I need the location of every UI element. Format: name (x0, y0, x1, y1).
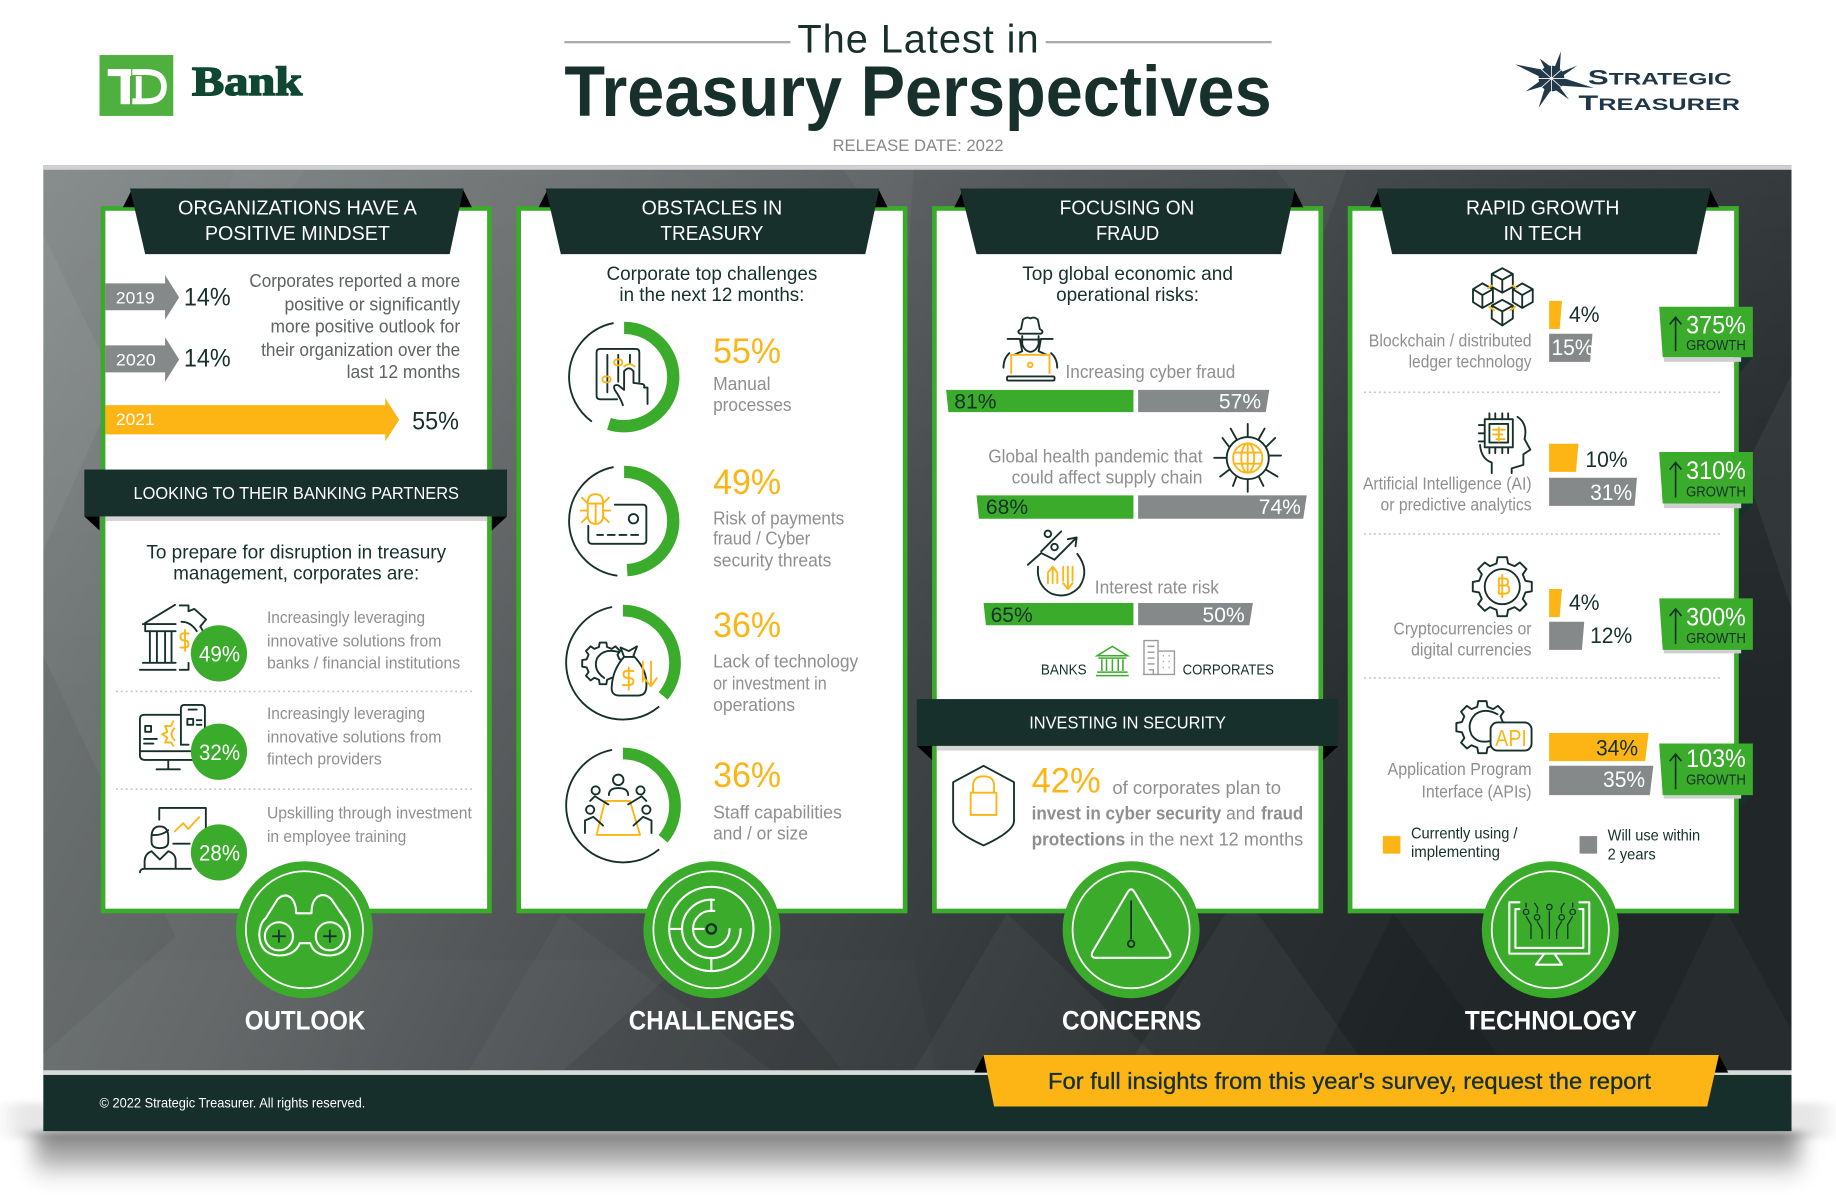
flag: 310% growth: 310% (1686, 458, 1746, 485)
badge: technology: TECHNOLOGY (1465, 1005, 1637, 1035)
tech: artificial intelligence: or predictive analytics (1381, 495, 1532, 515)
footer bar (43, 1070, 1792, 1131)
icon: blockchain cubes (1473, 268, 1533, 326)
legend: will use within 2 years: Will use within (1608, 828, 1700, 845)
item: fintech 32%: Increasingly leveraging (267, 704, 425, 723)
text: 42% statement: in the next 12 months (1130, 829, 1303, 849)
icon: gear and money bag (582, 643, 657, 696)
risk: interest rate: Interest rate risk (1095, 578, 1220, 598)
heading: obstacles: TREASURY (660, 222, 764, 245)
heading: rapid growth (1370, 189, 1719, 254)
badge: outlook: OUTLOOK (245, 1005, 366, 1035)
tech: blockchain: 4% (1569, 302, 1599, 327)
heading: obstacles: OBSTACLES IN (642, 196, 782, 219)
subheading: top challenges: Corporate top challenges (607, 264, 817, 285)
icon: computer and phone: 32% (199, 740, 240, 765)
background panel (43, 165, 1792, 1074)
item: payments fraud 49%: 49% (713, 463, 781, 502)
icon: maze target (669, 887, 753, 971)
panel: technology (1350, 189, 1753, 911)
heading: rapid growth: RAPID GROWTH (1466, 196, 1619, 219)
icon: touch sliders (597, 349, 648, 405)
risk: interest rate: 65% (991, 604, 1033, 627)
call to action banner: For full insights from this year's survey, request the report (1048, 1068, 1651, 1094)
title: The Latest in (797, 18, 1039, 62)
call to action banner (974, 1055, 1728, 1107)
heading: fraud (954, 189, 1303, 254)
heading: positive mindset: POSITIVE MINDSET (205, 222, 390, 245)
subheading: top challenges: in the next 12 months: (619, 285, 804, 306)
icon: binoculars (259, 895, 350, 956)
text: outlook paragraph: their organization over the (261, 340, 460, 360)
item: fintech 32%: fintech providers (267, 750, 382, 769)
icon: bug on card (581, 494, 646, 544)
badge: challenges: CHALLENGES (629, 1005, 795, 1035)
subheading: disruption (146, 543, 446, 585)
heading: obstacles (539, 189, 888, 254)
icon: warning triangle (1092, 889, 1170, 958)
legend: banks and corporates: CORPORATES (1183, 662, 1274, 678)
tech: cryptocurrencies: 4% (1569, 590, 1599, 615)
heading: positive mindset (123, 189, 472, 254)
risk: pandemic: could affect supply chain (1012, 468, 1203, 488)
band: investing in security (917, 699, 1338, 760)
item: training 28%: in employee training (267, 827, 406, 846)
heading: positive mindset: ORGANIZATIONS HAVE A (178, 196, 417, 219)
icon: percent and arrows (1028, 531, 1084, 596)
flag: 375% growth: 375% (1686, 313, 1746, 340)
heading: fraud: FRAUD (1096, 222, 1159, 245)
arrow: 2021: 55% (412, 409, 459, 436)
flag: 103% growth (1659, 744, 1753, 809)
subheading: risks: operational risks: (1056, 285, 1199, 306)
item: manual processes 55%: Manual (713, 374, 770, 394)
title (564, 18, 1272, 155)
item: payments fraud 49%: Risk of payments (713, 509, 844, 529)
risk: pandemic: Global health pandemic that (988, 447, 1203, 467)
item: technology 36%: 36% (713, 606, 781, 645)
item: banks 49% (140, 605, 460, 681)
icon: gear with API badge (1456, 701, 1532, 753)
item: technology 36%: operations (713, 695, 795, 715)
copyright: © 2022 Strategic Treasurer. All rights reserved. (100, 1095, 365, 1111)
icon: circuit monitor (1509, 902, 1589, 965)
icon: shield with lock (953, 766, 1014, 845)
tech: API (1388, 701, 1753, 809)
text: 42% statement (1032, 762, 1303, 849)
tech: API: 34% (1596, 735, 1638, 760)
title: Treasury Perspectives (564, 52, 1272, 132)
tech: blockchain: Blockchain / distributed (1369, 331, 1532, 351)
tech: blockchain: ledger technology (1409, 352, 1532, 372)
flag: 103% growth: 103% (1686, 746, 1746, 773)
drop shadow under main panel (9, 1103, 1827, 1197)
subheading: risks (1022, 264, 1233, 306)
arrow: 2021 (105, 398, 459, 441)
tech: cryptocurrencies: digital currencies (1411, 640, 1532, 660)
tech: API: Interface (APIs) (1421, 781, 1532, 801)
text: 42% statement: 42% (1032, 762, 1101, 801)
TD Bank logo (100, 55, 302, 116)
text: 42% statement: and (1226, 804, 1255, 824)
donut: 36% (566, 606, 680, 720)
icon: hacker with laptop (1003, 318, 1057, 381)
tech: artificial intelligence: 10% (1585, 447, 1628, 472)
flag: 375% growth: GROWTH (1686, 338, 1746, 354)
flag: 300% growth: 300% (1686, 604, 1746, 631)
risk: cyber fraud: 57% (1219, 391, 1261, 414)
badge: concerns: CONCERNS (1062, 1005, 1201, 1035)
item: banks 49%: innovative solutions from (267, 631, 441, 650)
item: payments fraud 49%: fraud / Cyber (713, 528, 810, 548)
icon: gear with API badge: API (1495, 725, 1527, 751)
band: banking partners: LOOKING TO THEIR BANKING PARTNERS (133, 483, 459, 503)
title: RELEASE DATE: 2022 (833, 137, 1003, 155)
risk: interest rate: 50% (1203, 604, 1245, 627)
item: technology 36%: or investment in (713, 674, 827, 694)
risk: pandemic (977, 424, 1307, 519)
item: training 28% (140, 804, 472, 881)
tech: artificial intelligence (1363, 413, 1753, 519)
flag: 310% growth (1659, 452, 1753, 519)
icon: team around table (585, 775, 651, 835)
icon: bank and gear (140, 605, 247, 681)
text: outlook paragraph: Corporates reported a more (249, 271, 460, 291)
tech: cryptocurrencies: 12% (1590, 623, 1632, 648)
Strategic Treasurer logo (1515, 52, 1740, 115)
text: outlook paragraph: positive or significantly (285, 294, 461, 314)
legend: currently using: implementing (1411, 844, 1500, 861)
subheading: risks: Top global economic and (1022, 264, 1233, 285)
flag: 375% growth (1659, 307, 1753, 372)
item: staff 36%: Staff capabilities (713, 803, 842, 823)
text: 42% statement: invest in cyber security (1032, 804, 1221, 824)
risk: cyber fraud: Increasing cyber fraud (1066, 362, 1235, 382)
icon: computer and phone (140, 705, 247, 780)
tech: artificial intelligence: Artificial Intelligence (AI) (1363, 473, 1532, 493)
text: 42% statement: protections (1032, 829, 1125, 849)
arrow: 2019: 14% (184, 285, 231, 312)
item: staff 36% (566, 749, 842, 862)
flag: 103% growth: GROWTH (1686, 773, 1746, 789)
arrow: 2020: 2020 (116, 351, 156, 369)
arrow: 2020: 14% (184, 346, 231, 373)
flag: 300% growth (1659, 598, 1753, 664)
icon: person at presentation board: 28% (199, 841, 240, 866)
item: staff 36%: and / or size (713, 824, 808, 844)
item: technology 36%: Lack of technology (713, 651, 859, 671)
badge: concerns (1062, 861, 1201, 1035)
badge: outlook (236, 861, 373, 1035)
donut: 49% (569, 466, 679, 576)
text: outlook paragraph (249, 271, 461, 382)
item: payments fraud 49%: security threats (713, 551, 831, 571)
risk: pandemic: 74% (1259, 496, 1301, 519)
arrow: 2019: 2019 (116, 289, 155, 307)
text: outlook paragraph: last 12 months (347, 362, 460, 382)
item: banks 49%: banks / financial institutions (267, 654, 460, 673)
item: technology 36% (566, 606, 859, 720)
item: manual processes 55% (569, 322, 792, 432)
subheading: top challenges (607, 264, 817, 306)
risk: interest rate (984, 531, 1253, 627)
panel: outlook (84, 189, 507, 911)
legend: will use within 2 years: 2 years (1608, 846, 1656, 863)
tech: blockchain (1369, 268, 1753, 372)
subheading: disruption: management, corporates are: (173, 564, 419, 585)
arrow: 2019 (105, 275, 231, 320)
panel: challenges (519, 189, 905, 911)
legend: will use within 2 years (1580, 828, 1700, 863)
arrow: 2021: 2021 (116, 411, 155, 429)
subheading: disruption: To prepare for disruption in treasury (146, 543, 446, 564)
badge: challenges (629, 861, 795, 1035)
text: outlook paragraph: more positive outlook for (270, 317, 460, 337)
band: banking partners (84, 470, 507, 530)
legend: banks and corporates (1041, 641, 1274, 678)
tech: cryptocurrencies (1393, 557, 1753, 664)
tech: API: Application Program (1388, 759, 1532, 779)
Strategic Treasurer logo: T REASURER (1578, 92, 1740, 115)
item: staff 36%: 36% (713, 756, 781, 795)
tech: artificial intelligence: 31% (1590, 480, 1632, 505)
icon: bitcoin gear (1473, 557, 1532, 616)
item: manual processes 55%: 55% (713, 332, 781, 371)
icon: virus globe (1214, 424, 1281, 492)
legend: banks and corporates: BANKS (1041, 662, 1087, 678)
risk: pandemic: 68% (986, 496, 1028, 519)
icon: chip and head (1479, 413, 1530, 473)
Strategic Treasurer logo: S TRATEGIC (1588, 66, 1732, 89)
icon: person at presentation board (140, 808, 247, 881)
legend: currently using (1383, 825, 1518, 861)
text: 42% statement: fraud (1261, 804, 1303, 824)
TD Bank logo: Bank (192, 58, 302, 104)
band: investing in security: INVESTING IN SECURITY (1029, 712, 1226, 732)
legend: currently using: Currently using / (1411, 825, 1518, 842)
icon: green bank (1096, 646, 1129, 676)
donut: 36% (566, 749, 680, 862)
arrow: 2020 (105, 337, 231, 382)
item: fintech 32%: innovative solutions from (267, 727, 441, 746)
flag: 300% growth: GROWTH (1686, 631, 1746, 647)
icon: gray buildings (1143, 641, 1174, 674)
tech: blockchain: 15% (1551, 335, 1594, 360)
item: training 28%: Upskilling through investment (267, 804, 472, 823)
item: manual processes 55%: processes (713, 395, 792, 415)
panel: concerns (917, 189, 1338, 911)
risk: cyber fraud: 81% (954, 391, 996, 414)
donut: 55% (569, 322, 679, 432)
item: banks 49%: Increasingly leveraging (267, 608, 425, 627)
tech: cryptocurrencies: Cryptocurrencies or (1393, 619, 1532, 639)
item: payments fraud 49% (569, 463, 844, 576)
flag: 310% growth: GROWTH (1686, 484, 1746, 500)
risk: cyber fraud (946, 318, 1269, 414)
heading: rapid growth: IN TECH (1503, 222, 1582, 245)
icon: bank and gear: 49% (199, 642, 240, 667)
heading: fraud: FOCUSING ON (1060, 196, 1194, 219)
item: fintech 32% (140, 704, 441, 780)
text: 42% statement: of corporates plan to (1112, 778, 1281, 798)
tech: API: 35% (1603, 767, 1645, 792)
badge: technology (1465, 861, 1637, 1035)
